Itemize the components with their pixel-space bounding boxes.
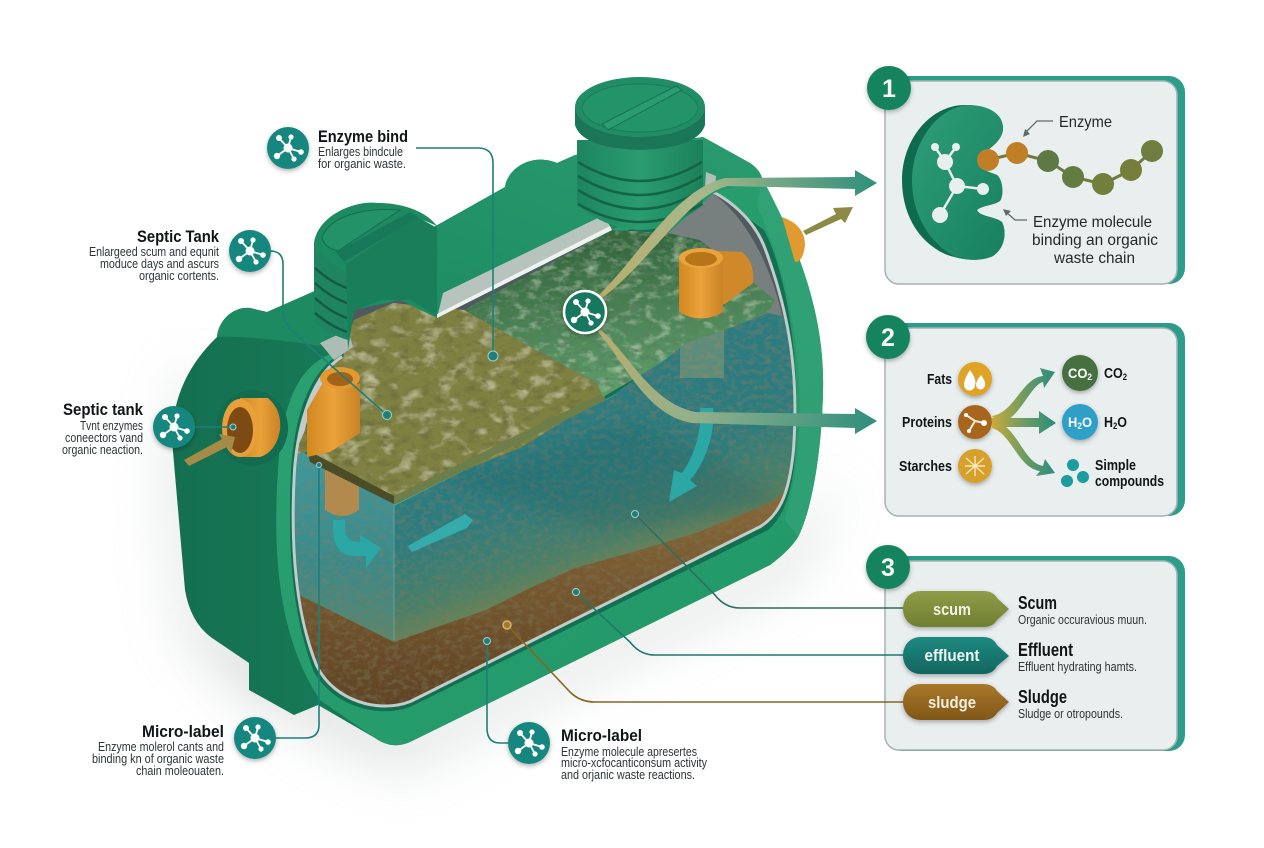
panel 2: breakdown: Proteins [902, 414, 952, 431]
enzyme shape [902, 105, 1005, 260]
central enzyme marker [564, 291, 606, 333]
label: Micro-label left: Enzyme molerol cants and [98, 740, 224, 754]
number badge 1 [867, 66, 911, 110]
label: Septic Tank: Enlargeed scum and equnit [89, 245, 219, 259]
panel 2: breakdown: 2 [1123, 372, 1127, 382]
panel 2: breakdown: CO [1104, 366, 1126, 382]
icon: micro-label right [508, 722, 550, 764]
panel 1: enzyme binding: Enzyme molecule [1033, 214, 1152, 231]
label: Septic Tank: moduce days and ascurs [100, 257, 219, 271]
icon: starches [958, 449, 992, 483]
panel 3: layers: Scum [1018, 593, 1057, 613]
label: Micro-label right: Enzyme molecule apresertes [561, 745, 697, 759]
icon: micro-label left [234, 717, 276, 759]
panel 3: layers [866, 545, 1185, 751]
icon: H2O [1062, 404, 1098, 440]
rim shoulder [217, 290, 348, 350]
inlet pipe [216, 390, 288, 466]
number badge 3: 3 [881, 554, 895, 582]
layer tag: scum: scum [933, 600, 971, 619]
sludge layer [300, 492, 784, 704]
panel 3: layers: Effluent hydrating hamts. [1018, 659, 1137, 674]
label: Septic tank inlet: organic neaction. [62, 443, 143, 457]
front rim [276, 178, 823, 745]
icon: septic tank [229, 230, 271, 272]
label: Enzyme bind: Enzyme bind [318, 127, 408, 146]
leader lines [193, 148, 903, 743]
panel 2: breakdown: compounds [1095, 473, 1164, 490]
panel 2: breakdown: 2 [1113, 421, 1117, 431]
icon: CO2 [1062, 355, 1098, 391]
panel 1: enzyme binding: waste chain [1053, 250, 1135, 267]
ground shadow [155, 360, 850, 775]
label: Micro-label left: Micro-label [142, 722, 224, 741]
label: Micro-label right: micro-xcfocanticonsum activity [561, 756, 708, 770]
effluent water [394, 313, 794, 642]
scum green [464, 230, 775, 397]
back wall [330, 194, 792, 380]
septic tank [172, 77, 823, 745]
glass edge [295, 193, 794, 705]
icon: septic tank inlet [153, 406, 195, 448]
arrow: inlet flow [184, 434, 235, 466]
tank interior [294, 194, 794, 704]
number badge 3 [866, 545, 910, 589]
label: Septic Tank: organic cortents. [139, 269, 219, 283]
label: Septic Tank [89, 227, 271, 283]
label: Enzyme bind: for organic waste. [318, 157, 406, 171]
panel 1: enzyme binding: Enzyme [1059, 114, 1112, 131]
label: Septic Tank: Septic Tank [137, 227, 219, 246]
panel 2: breakdown: O [1117, 415, 1127, 431]
label: Enzyme bind: Enlarges bindcule [318, 145, 403, 159]
layer tag: effluent [903, 637, 1009, 674]
icon: H2O: H [1068, 414, 1078, 430]
right upper pipe [679, 248, 753, 318]
panel 3: layers: Sludge [1018, 687, 1067, 707]
icon: CO2: 2 [1087, 372, 1092, 382]
panel 2: breakdown: H [1104, 415, 1114, 431]
label: Micro-label left [92, 717, 276, 778]
main lid [575, 77, 705, 230]
layer tag: sludge: sludge [928, 693, 976, 712]
tank body [172, 137, 823, 745]
label: Enzyme bind [267, 127, 408, 171]
label: Septic tank inlet [62, 400, 195, 457]
big arrow to panel 2 [598, 329, 877, 434]
label: Septic tank inlet: Tvnt enzymes [80, 419, 143, 433]
icon: H2O: O [1082, 414, 1092, 430]
number badge 1: 1 [882, 75, 896, 103]
icon: proteins [958, 405, 992, 439]
panel 3: layers: Organic occuravious muun. [1018, 612, 1147, 627]
panel 3: layers: Effluent [1018, 640, 1073, 660]
number badge 2 [866, 315, 910, 359]
inner elbow pipe [307, 367, 360, 457]
cut slab [437, 215, 612, 318]
scum olive [294, 303, 603, 498]
arrow: outlet flow [803, 207, 853, 235]
layer tag: effluent: effluent [924, 646, 980, 665]
icon: CO2: CO [1068, 365, 1089, 381]
label: Micro-label right: Micro-label [561, 726, 642, 745]
label: Micro-label right [508, 722, 708, 782]
label: Micro-label left: binding kn of organic waste [92, 752, 224, 766]
label: Micro-label right: and orjanic waste reactions. [561, 768, 695, 782]
label: Septic tank inlet: Septic tank [63, 400, 143, 419]
label: Septic tank inlet: coneectors vand [65, 431, 143, 445]
outer right pipe stub [782, 217, 805, 262]
panel 2: breakdown [866, 315, 1185, 516]
panel 2: breakdown: Starches [899, 458, 952, 475]
top surface [317, 137, 762, 318]
label: Micro-label left: chain moleouaten. [136, 764, 224, 778]
right drop pipe [680, 330, 724, 378]
lower pipe [325, 465, 359, 516]
icon: simple compounds [1061, 459, 1089, 487]
arrow: molecule [1003, 209, 1027, 220]
panel 2: breakdown: Fats [927, 371, 952, 388]
arrow: enzyme [1023, 121, 1053, 137]
icon: H2O: 2 [1077, 421, 1082, 431]
branching arrows [992, 368, 1056, 476]
panel 3: layers: Sludge or otropounds. [1018, 706, 1123, 721]
panel 1: enzyme binding: binding an organic [1032, 232, 1158, 249]
panel 1: enzyme binding [867, 66, 1185, 284]
layer tag: sludge [903, 684, 1009, 720]
half lid [314, 203, 437, 350]
number badge 2: 2 [881, 324, 895, 352]
organic waste chain [977, 140, 1163, 195]
big arrow to panel 1 [598, 170, 877, 299]
icon: enzyme bind [267, 127, 309, 169]
panel 2: breakdown: Simple [1095, 457, 1136, 474]
icon: fats [958, 362, 992, 396]
flow arrows [669, 408, 713, 502]
layer tag: scum [903, 591, 1009, 627]
